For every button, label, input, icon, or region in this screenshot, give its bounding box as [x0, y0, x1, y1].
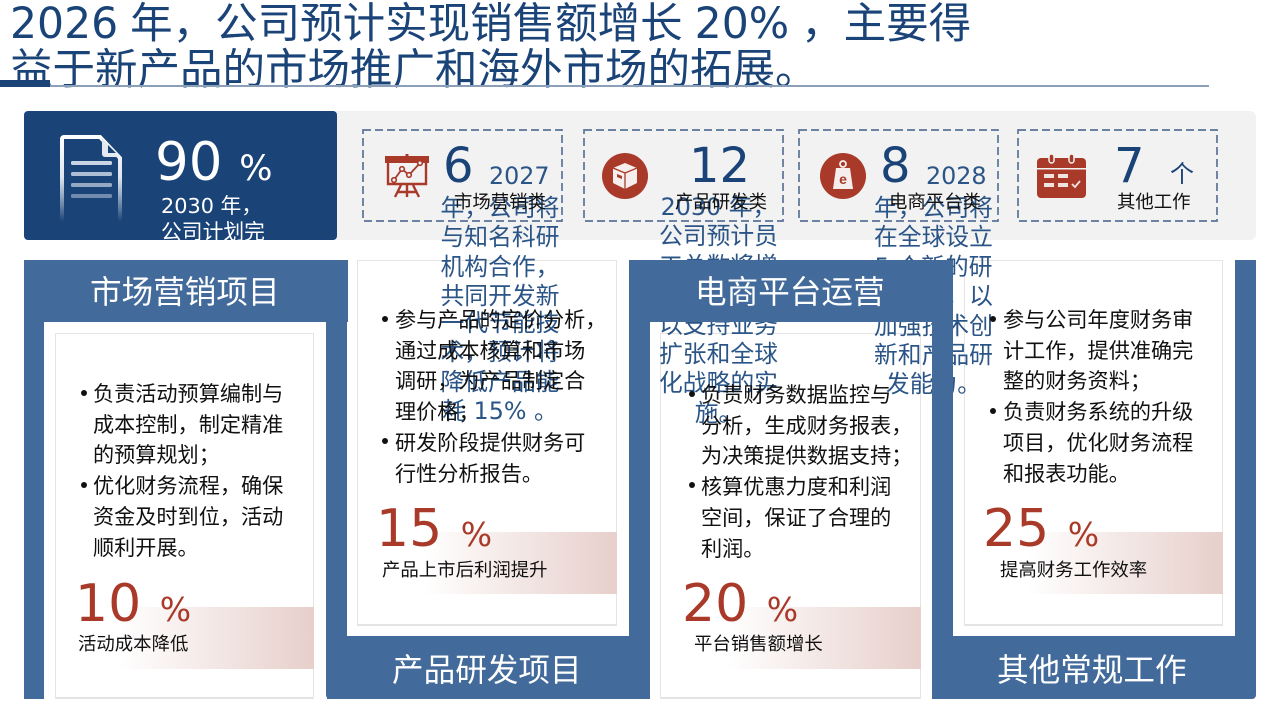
- category label: product: 产品研发类: [675, 192, 767, 213]
- e-commerce right strip: [932, 322, 953, 699]
- bullet: [81, 482, 87, 488]
- bullet: [382, 438, 388, 444]
- icon: document: [60, 135, 122, 220]
- metric: 20%: 20 %: [682, 574, 798, 634]
- overflow text: 2027 plan: 年，公司将 与知名科研 机构合作， 共同开发新: [440, 194, 559, 310]
- panel: other base: [932, 260, 1256, 699]
- text: other duties: 参与公司年度财务审 计工作，提供准确完 整的财务资料； 负责财务系统的升级 项目，优化财务流程 和报表功能。: [1003, 307, 1193, 486]
- heading: marketing: 市场营销项目: [90, 275, 280, 311]
- e-commerce white inset: [650, 322, 933, 699]
- stat box: marketing: [362, 129, 563, 222]
- bullet: [382, 316, 388, 322]
- product white inset: [347, 260, 629, 636]
- other white inset: [953, 260, 1235, 636]
- value: 8: 8: [880, 138, 911, 194]
- metric: 25%: 25 %: [983, 499, 1099, 559]
- text: marketing duties: 负责活动预算编制与 成本控制，制定精准 的预算规划； 优化财务流程，确保 资金及时到位，活动 顺利开展。: [93, 381, 283, 560]
- icon: e-commerce bag: [820, 153, 866, 199]
- product card: [357, 260, 617, 626]
- header rule: [0, 85, 1209, 87]
- text: e-commerce duties: 负责财务数据监控与 分析，生成财务报表， 为决策提供数据支持； 核算优惠力度和利润 空间，保证了合理的 利润。: [701, 382, 912, 561]
- icon: presentation chart: [385, 154, 429, 198]
- bullet: [81, 390, 87, 396]
- metric: 15%: 15 %: [376, 499, 492, 559]
- category label: e-commerce: 电商平台类: [889, 192, 981, 213]
- stat box: e-commerce: [798, 129, 999, 222]
- marketing card: [55, 333, 314, 699]
- overflow text: 2027: 2027: [489, 162, 550, 190]
- metric label: 提高财务工作效率: [1000, 560, 1147, 581]
- bullet: [990, 316, 996, 322]
- panel: product base: [326, 260, 650, 699]
- overflow text: 2030 plan: 2030 年， 公司预计员 工总数将增 长至五千人， 以支持业务 扩张和全球 化战略的实 施。: [655, 193, 798, 427]
- icon: e-commerce bag: e: [839, 171, 847, 187]
- metric: 10%: 10 %: [75, 574, 191, 634]
- gradient band: product: [422, 532, 617, 594]
- panel: marketing base: [24, 260, 348, 699]
- marketing white inset: [44, 322, 327, 699]
- category label: other: 其他工作: [1117, 192, 1191, 213]
- header band: e-commerce: [629, 260, 953, 322]
- overflow text: 2028 plan: 年，公司将 在全球设立 5 个新的研 发中心，以 加强技术创 新和产品研 发能力。: [874, 194, 993, 398]
- metric label: 活动成本降低: [78, 634, 188, 655]
- stat box: product: [583, 129, 784, 222]
- stat value 90%: 90 %: [155, 132, 273, 193]
- metric label: 平台销售额增长: [694, 634, 823, 655]
- bullet: [689, 482, 695, 488]
- bullet: [689, 391, 695, 397]
- stat box: other: [1017, 129, 1218, 222]
- unit: 个: 个: [1170, 160, 1194, 188]
- heading: e-commerce: 电商平台运营: [695, 275, 885, 311]
- panel: completion stat: [24, 111, 337, 240]
- category label: marketing: 市场营销类: [454, 192, 546, 213]
- value: 6: 6: [443, 138, 474, 194]
- heading: other: 其他常规工作: [997, 653, 1187, 689]
- heading: product: 产品研发项目: [392, 653, 582, 689]
- metric label: 产品上市后利润提升: [382, 560, 548, 581]
- other card: [964, 260, 1223, 626]
- panel: e-commerce base: [629, 260, 650, 699]
- bullet: [990, 408, 996, 414]
- overflow text: 2028: 2028: [926, 162, 987, 190]
- gradient band: e-commerce: [726, 607, 921, 669]
- gradient band: other: [1028, 532, 1223, 594]
- title: 2026 年，公司预计实现销售额增长 20% ，主要得 益于新产品的市场推广和海外市场的拓展。: [10, 0, 971, 95]
- gradient band: marketing: [119, 607, 314, 669]
- text: product duties: 参与产品的定价分析， 通过成本核算和市场 调研，为产品制定合 理价格； 研发阶段提供财务可 行性分析报告。: [395, 307, 606, 486]
- panel: category stats background: [300, 111, 1256, 240]
- value: 12: 12: [689, 138, 750, 194]
- icon: box: [602, 153, 648, 199]
- overflow text: 2027 plan continued: 一代节能技 术，预计将 降低产品能 耗 15% 。: [440, 309, 559, 425]
- value: 7: 7: [1114, 138, 1145, 194]
- header band: marketing: [24, 260, 348, 322]
- header accent: [0, 80, 50, 87]
- icon: calendar: [1037, 154, 1086, 198]
- e-commerce card: [660, 333, 921, 699]
